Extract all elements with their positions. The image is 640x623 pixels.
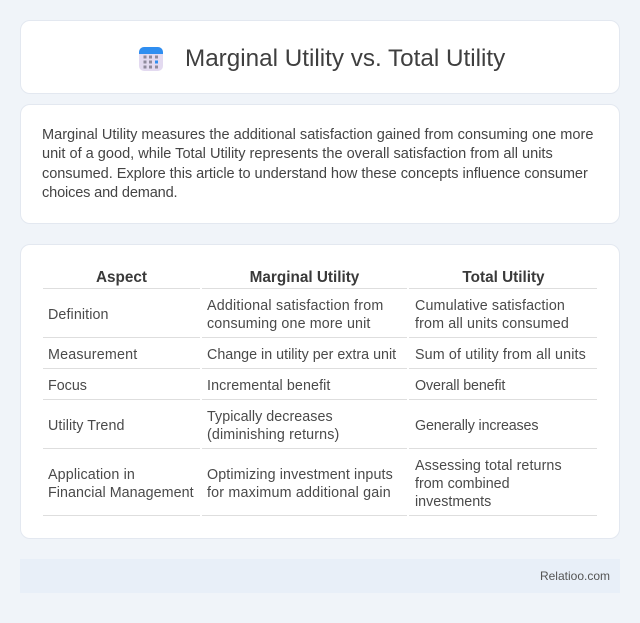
row: application in financial management: Optimizing investment inputs xyxy=(207,467,393,483)
row: utility trend: Typically decreases xyxy=(207,409,333,425)
row: application in financial management xyxy=(48,458,562,510)
row: application in financial management: Financial Management xyxy=(48,485,194,501)
row: application in financial management: from combined xyxy=(415,476,510,492)
row: measurement: Change in utility per extra unit xyxy=(207,347,396,363)
title: Marginal Utility vs. Total Utility xyxy=(185,45,505,72)
row: utility trend xyxy=(48,409,538,443)
row: utility trend: Generally increases xyxy=(415,418,538,434)
row: measurement: Measurement xyxy=(48,347,137,363)
footer bar xyxy=(20,559,620,593)
panel: introduction xyxy=(20,104,620,224)
row: application in financial management: Assessing total returns xyxy=(415,458,562,474)
table header row: Aspect xyxy=(96,269,147,286)
text block: introduction: consumed. Explore this article to understand how these concepts influence consumer xyxy=(42,166,588,182)
icon: calendar xyxy=(139,47,163,71)
row: definition: from all units consumed xyxy=(415,316,569,332)
table header row xyxy=(96,269,545,286)
row: definition: Cumulative satisfaction xyxy=(415,298,565,314)
table header row: Total Utility xyxy=(462,269,545,286)
row: application in financial management: Application in xyxy=(48,467,135,483)
row: definition: Additional satisfaction from xyxy=(207,298,383,314)
row: focus: Overall benefit xyxy=(415,378,505,394)
row: definition xyxy=(48,298,569,332)
table header row: Marginal Utility xyxy=(250,269,359,286)
row: definition: Definition xyxy=(48,307,109,323)
row: application in financial management: for maximum additional gain xyxy=(207,485,391,501)
row: measurement xyxy=(48,347,586,363)
row: definition: consuming one more unit xyxy=(207,316,371,332)
footer text: site name: Relatioo.com xyxy=(540,569,610,583)
text block: introduction xyxy=(42,126,593,201)
row: utility trend: (diminishing returns) xyxy=(207,427,339,443)
row: focus xyxy=(48,378,506,394)
row: application in financial management: investments xyxy=(415,494,491,510)
row: focus: Focus xyxy=(48,378,87,394)
row: utility trend: Utility Trend xyxy=(48,418,125,434)
panel: title card xyxy=(20,20,620,94)
text block: introduction: Marginal Utility measures the additional satisfaction gained from consuming one more xyxy=(42,126,593,142)
text block: introduction: unit of a good, while Total Utility represents the overall satisfaction from all units xyxy=(42,146,553,162)
panel: comparison table xyxy=(20,244,620,539)
row: measurement: Sum of utility from all units xyxy=(415,347,586,363)
row: focus: Incremental benefit xyxy=(207,378,330,394)
text block: introduction: choices and demand. xyxy=(42,185,177,201)
